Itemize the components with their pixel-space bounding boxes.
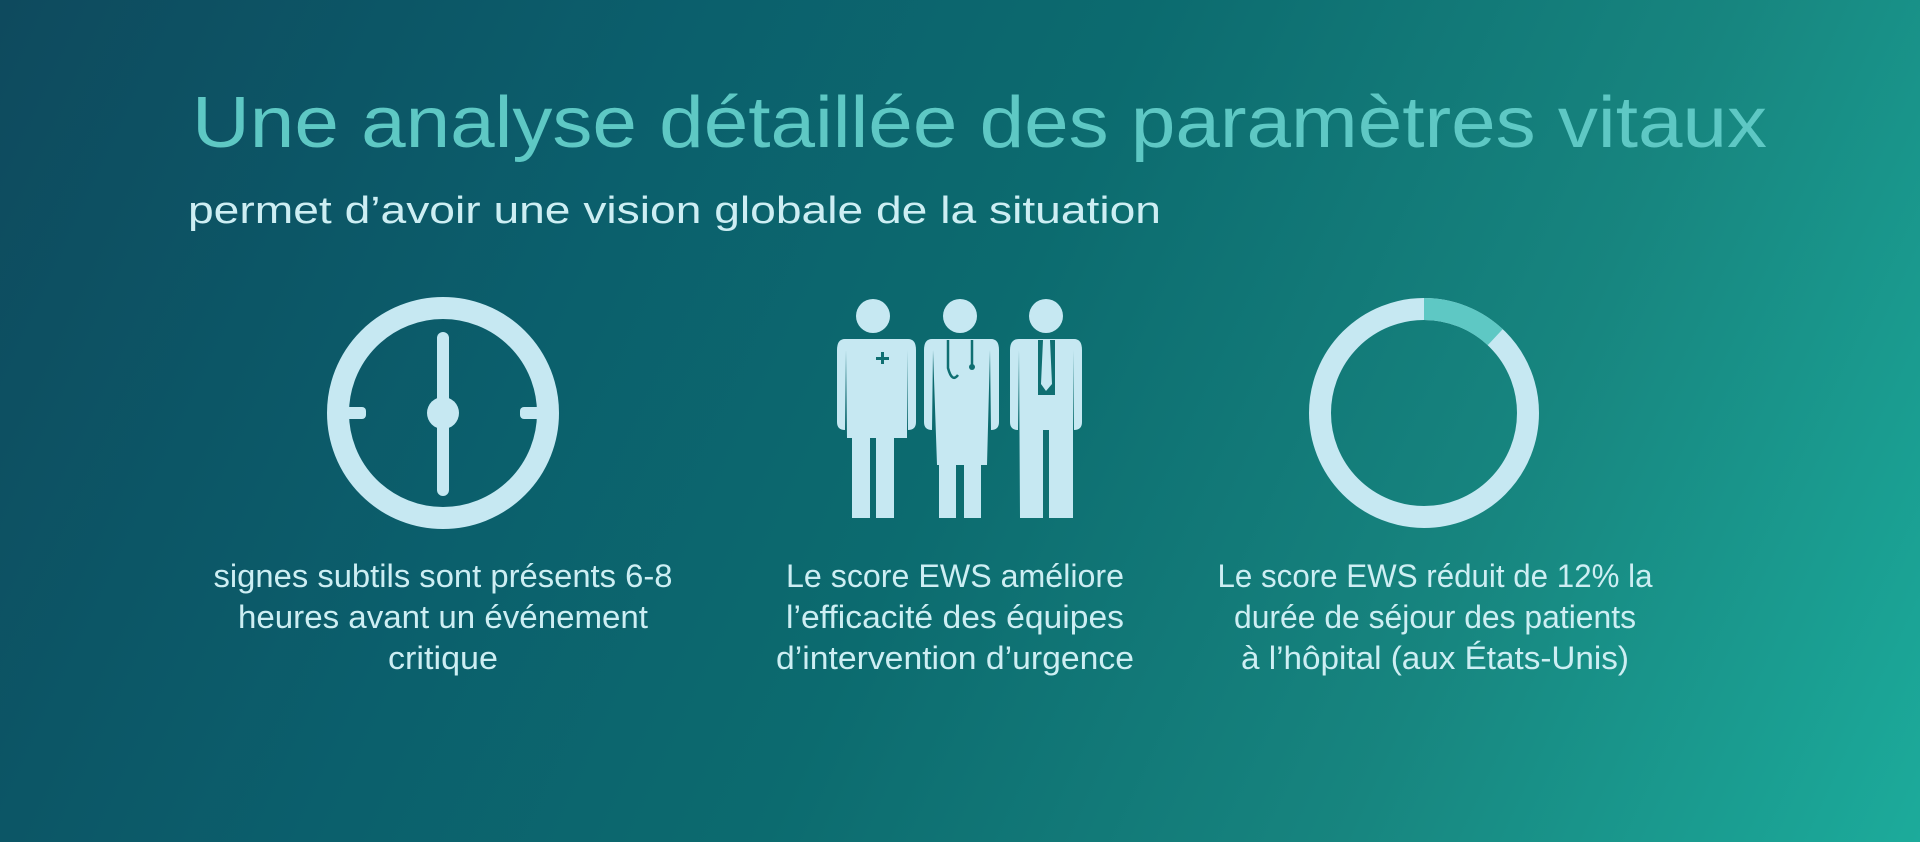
text: EWS séjour: Le score EWS réduit de 12% la bbox=[1218, 558, 1653, 594]
subtitle: permet d’avoir une vision globale de la situation bbox=[188, 190, 1161, 232]
text: signes subtils: signes subtils sont présents 6-8 bbox=[214, 558, 672, 594]
text: signes subtils: critique bbox=[388, 640, 498, 676]
text: EWS équipes: Le score EWS améliore bbox=[786, 558, 1124, 594]
text: EWS séjour bbox=[1218, 558, 1653, 676]
text: signes subtils bbox=[214, 558, 672, 676]
text: EWS équipes: d’intervention d’urgence bbox=[776, 640, 1134, 676]
icon: clock bbox=[338, 308, 548, 518]
figure: doctor bbox=[924, 299, 999, 518]
text: EWS séjour: à l’hôpital (aux États-Unis) bbox=[1241, 640, 1629, 676]
text: signes subtils: heures avant un événement bbox=[238, 599, 648, 635]
figure: nurse bbox=[837, 299, 916, 518]
title: Une analyse détaillée des paramètres vitaux bbox=[192, 83, 1767, 163]
text: EWS équipes: l’efficacité des équipes bbox=[786, 599, 1124, 635]
icon: medical team bbox=[837, 299, 1082, 518]
text: EWS équipes bbox=[776, 558, 1134, 676]
figure: manager bbox=[1010, 299, 1082, 518]
chart: donut 12% bbox=[1320, 309, 1528, 517]
text: EWS séjour: durée de séjour des patients bbox=[1234, 599, 1636, 635]
